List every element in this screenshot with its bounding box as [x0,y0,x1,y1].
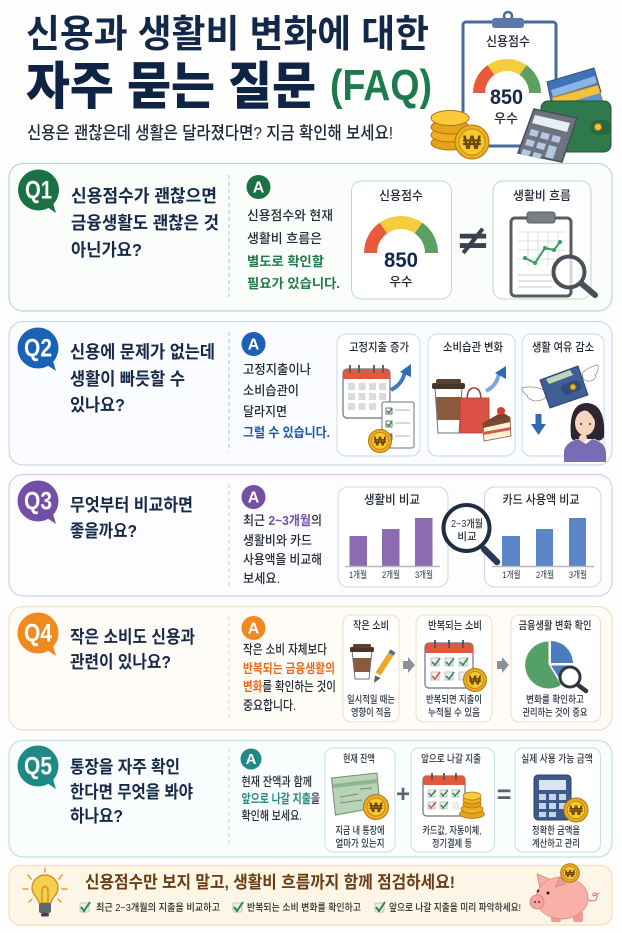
A badge [240,748,262,770]
bar chart: living expense comparison: 2개월 [382,569,400,581]
question 2: 신용에 문제가 없는데 [70,342,215,362]
check item 2 [233,901,361,914]
card: credit score gauge [352,181,452,299]
answer 2 [243,362,330,440]
card: repeated spending: 누적될 수 있음 [428,706,480,719]
icon: credit score clipboard: 우수 [494,111,518,126]
bar chart: card spending comparison [484,487,601,587]
question 2: 생활이 빠듯할 수 [70,369,185,389]
card: repeated spending: 반복되는 소비 [428,619,482,632]
title line 1: 신용과 생활비 변화에 대한 [26,14,429,56]
icon: light bulb [23,868,67,916]
card: repeated spending: 반복되면 지출이 [426,694,482,706]
Q1 badge [18,170,59,213]
bar chart: card spending comparison: 3개월 [569,569,587,581]
answer 5: 현재 잔액과 함께 [242,774,312,789]
answer 5 [242,774,320,823]
panel: Q3 [9,474,612,596]
bar chart: living expense comparison [338,487,448,587]
question 5 [70,757,193,826]
panel: Q5 [9,740,612,857]
card: repeated spending: ₩ [469,672,482,688]
question 2: 있나요? [70,395,125,415]
card: current balance: ₩ [369,799,383,815]
Q2 badge [18,328,58,371]
A badge [246,175,270,199]
answer 3: 생활비와 카드 [243,533,312,548]
answer 1: 별도로 확인할 [247,254,324,269]
A badge: A [248,336,260,354]
answer 5: 확인해 보세요. [242,809,302,823]
question 1: 금융생활도 괜찮은 것 [71,213,219,233]
A badge [242,616,266,640]
check item 1: 최근 2~3개월의 지출을 비교하고 [96,901,220,914]
icon: credit score clipboard [463,12,556,146]
A badge: A [246,751,257,768]
card: financial life change check [511,615,600,722]
arrow [497,657,509,673]
answer 4: 반복되는 금융생활의 [243,661,335,676]
card: credit score gauge: 신용점수 [379,189,423,203]
answer 1: 필요가 있습니다. [247,276,340,291]
question 2 [70,342,215,415]
answer 1: 생활비 흐름은 [247,231,322,246]
bar chart: card spending comparison: 2개월 [536,569,554,581]
card: current balance [325,748,395,852]
card: financial life change check: 변화를 확인하고 [526,693,584,706]
answer 1: 신용점수와 현재 [247,208,333,223]
card: actual spendable amount: 실제 사용 가능 금액 [521,753,593,765]
answer 2: 달라지면 [243,404,287,419]
Q4 badge: Q4 [24,620,52,648]
answer 3: 보세요. [243,571,280,586]
Q2 badge: Q2 [24,334,52,362]
A badge: A [248,620,260,638]
header [26,12,611,162]
icon: magnifier with label [444,505,497,562]
card: upcoming expenses [411,748,494,852]
card: actual spendable amount [515,748,600,852]
icon: calculator [518,109,577,162]
answer 3: 최근 2~3개월의 [243,513,322,528]
Q5 badge [18,746,58,789]
card: small spending: 작은 소비 [353,619,389,632]
question 4: 관련이 있나요? [70,652,171,672]
Q3 badge [18,480,58,524]
question 5: 하나요? [70,806,123,826]
card: small spending: 일시적일 때는 [347,693,395,706]
card: less living margin: 생활 여유 감소 [532,340,594,354]
answer 4: 변화를 확인하는 것이 [243,679,336,694]
card: less living margin [522,334,606,462]
title line 2: 자주 묻는 질문 [26,58,316,115]
A badge: A [248,490,260,506]
check item 3: 앞으로 나갈 지출을 미리 파악하세요! [389,901,521,914]
card: spending habit change: 소비습관 변화 [443,341,503,354]
subtitle: 신용은 괜찮은데 생활은 달라졌다면? 지금 확인해 보세요! [27,123,393,143]
question 4 [70,627,195,672]
answer 5: 앞으로 나갈 지출을 [242,792,320,806]
equals sign: = [497,781,511,809]
Q4 badge [18,612,58,656]
icon: magnifier with label: 2~3개월 [451,517,483,530]
pie chart with magnifier [525,641,586,691]
plus sign: + [396,781,410,808]
answer 4 [243,642,336,713]
card: current balance: 얼마가 있는지 [336,837,384,850]
card: fixed expense increase: 고정지출 증가 [349,341,409,354]
panel: Q2 [9,322,612,465]
question 5: 한다면 무엇을 봐야 [70,782,193,802]
bar chart: card spending comparison: 1개월 [502,569,520,581]
Q3 badge: Q3 [24,488,52,516]
answer 4: 중요합니다. [243,698,296,713]
question 1: 아닌가요? [71,240,142,260]
bar chart: living expense comparison: 생활비 비교 [364,492,420,507]
answer 1 [247,208,340,291]
A badge [242,332,266,356]
card: living expense flow: 생활비 흐름 [513,188,571,203]
question 4: 작은 소비도 신용과 [70,627,195,647]
card: credit score gauge: 우수 [389,275,413,289]
not-equal sign: ≠ [455,215,491,264]
question 3 [70,495,193,541]
check item 3 [375,901,521,914]
icon: coin stack: ₩ [463,133,481,154]
bar chart: card spending comparison: 카드 사용액 비교 [502,493,580,507]
icon: credit score clipboard: 신용점수 [486,34,530,49]
answer 3 [243,513,322,586]
icon: wallet with cards [541,68,611,152]
arrow [403,657,415,673]
question 3: 좋을까요? [70,521,137,541]
title line 2: (FAQ) [330,61,432,110]
answer 2: 그럴 수 있습니다. [243,425,330,440]
card: upcoming expenses: 정기결제 등 [432,837,472,850]
card: fixed expense increase [337,334,420,456]
card: actual spendable amount: 계산하고 관리 [532,837,580,850]
question 1 [71,186,219,260]
card: credit score gauge: 850 [384,249,418,272]
A badge: A [253,180,265,196]
question 5: 통장을 자주 확인 [70,757,180,777]
question 1: 신용점수가 괜찮으면 [71,186,217,206]
woman [564,403,606,462]
icon: coin stack [431,110,489,159]
answer 4: 작은 소비 자체보다 [243,642,327,657]
card: spending habit change [428,334,515,456]
checklist [80,901,521,914]
check item 2: 반복되는 소비 변화를 확인하고 [247,901,361,914]
Q1 badge: Q1 [25,176,52,204]
question 3: 무엇부터 비교하면 [70,495,193,515]
card: fixed expense increase: ₩ [374,434,387,448]
answer 2: 소비습관이 [243,383,299,398]
card: actual spendable amount: 정확한 금액을 [532,824,580,837]
panel: closing banner [9,864,612,925]
panel: Q4 [9,606,612,730]
banner heading: 신용점수만 보지 말고, 생활비 흐름까지 함께 점검하세요! [85,873,455,892]
card: upcoming expenses: 앞으로 나갈 지출 [421,752,481,765]
answer 2: 고정지출이나 [243,362,311,377]
bar chart: living expense comparison: 3개월 [415,569,433,581]
card: small spending [343,615,399,722]
icon: magnifier with label: 비교 [457,531,477,543]
icon: piggy bank [530,864,599,922]
icon: piggy bank: ₩ [565,868,575,880]
icon: credit score clipboard: 850 [490,86,523,109]
answer 3: 사용액을 비교해 [243,552,322,567]
card: financial life change check: 금융생활 변화 확인 [518,618,592,632]
card: living expense flow [493,181,595,299]
bar chart: living expense comparison: 1개월 [349,569,367,581]
panel: Q1 [9,164,612,311]
card: current balance: 지금 내 통장에 [336,824,384,837]
card: small spending: 영향이 적음 [351,706,391,719]
Q5 badge: Q5 [24,752,52,780]
card: current balance: 현재 잔액 [343,753,375,765]
card: financial life change check: 관리하는 것이 중요 [522,706,588,719]
A badge [242,485,266,509]
check item 1 [80,901,220,914]
card: actual spendable amount: ₩ [569,802,583,818]
card: upcoming expenses: 카드값, 자동이체, [422,824,482,837]
card: repeated spending [416,615,492,722]
